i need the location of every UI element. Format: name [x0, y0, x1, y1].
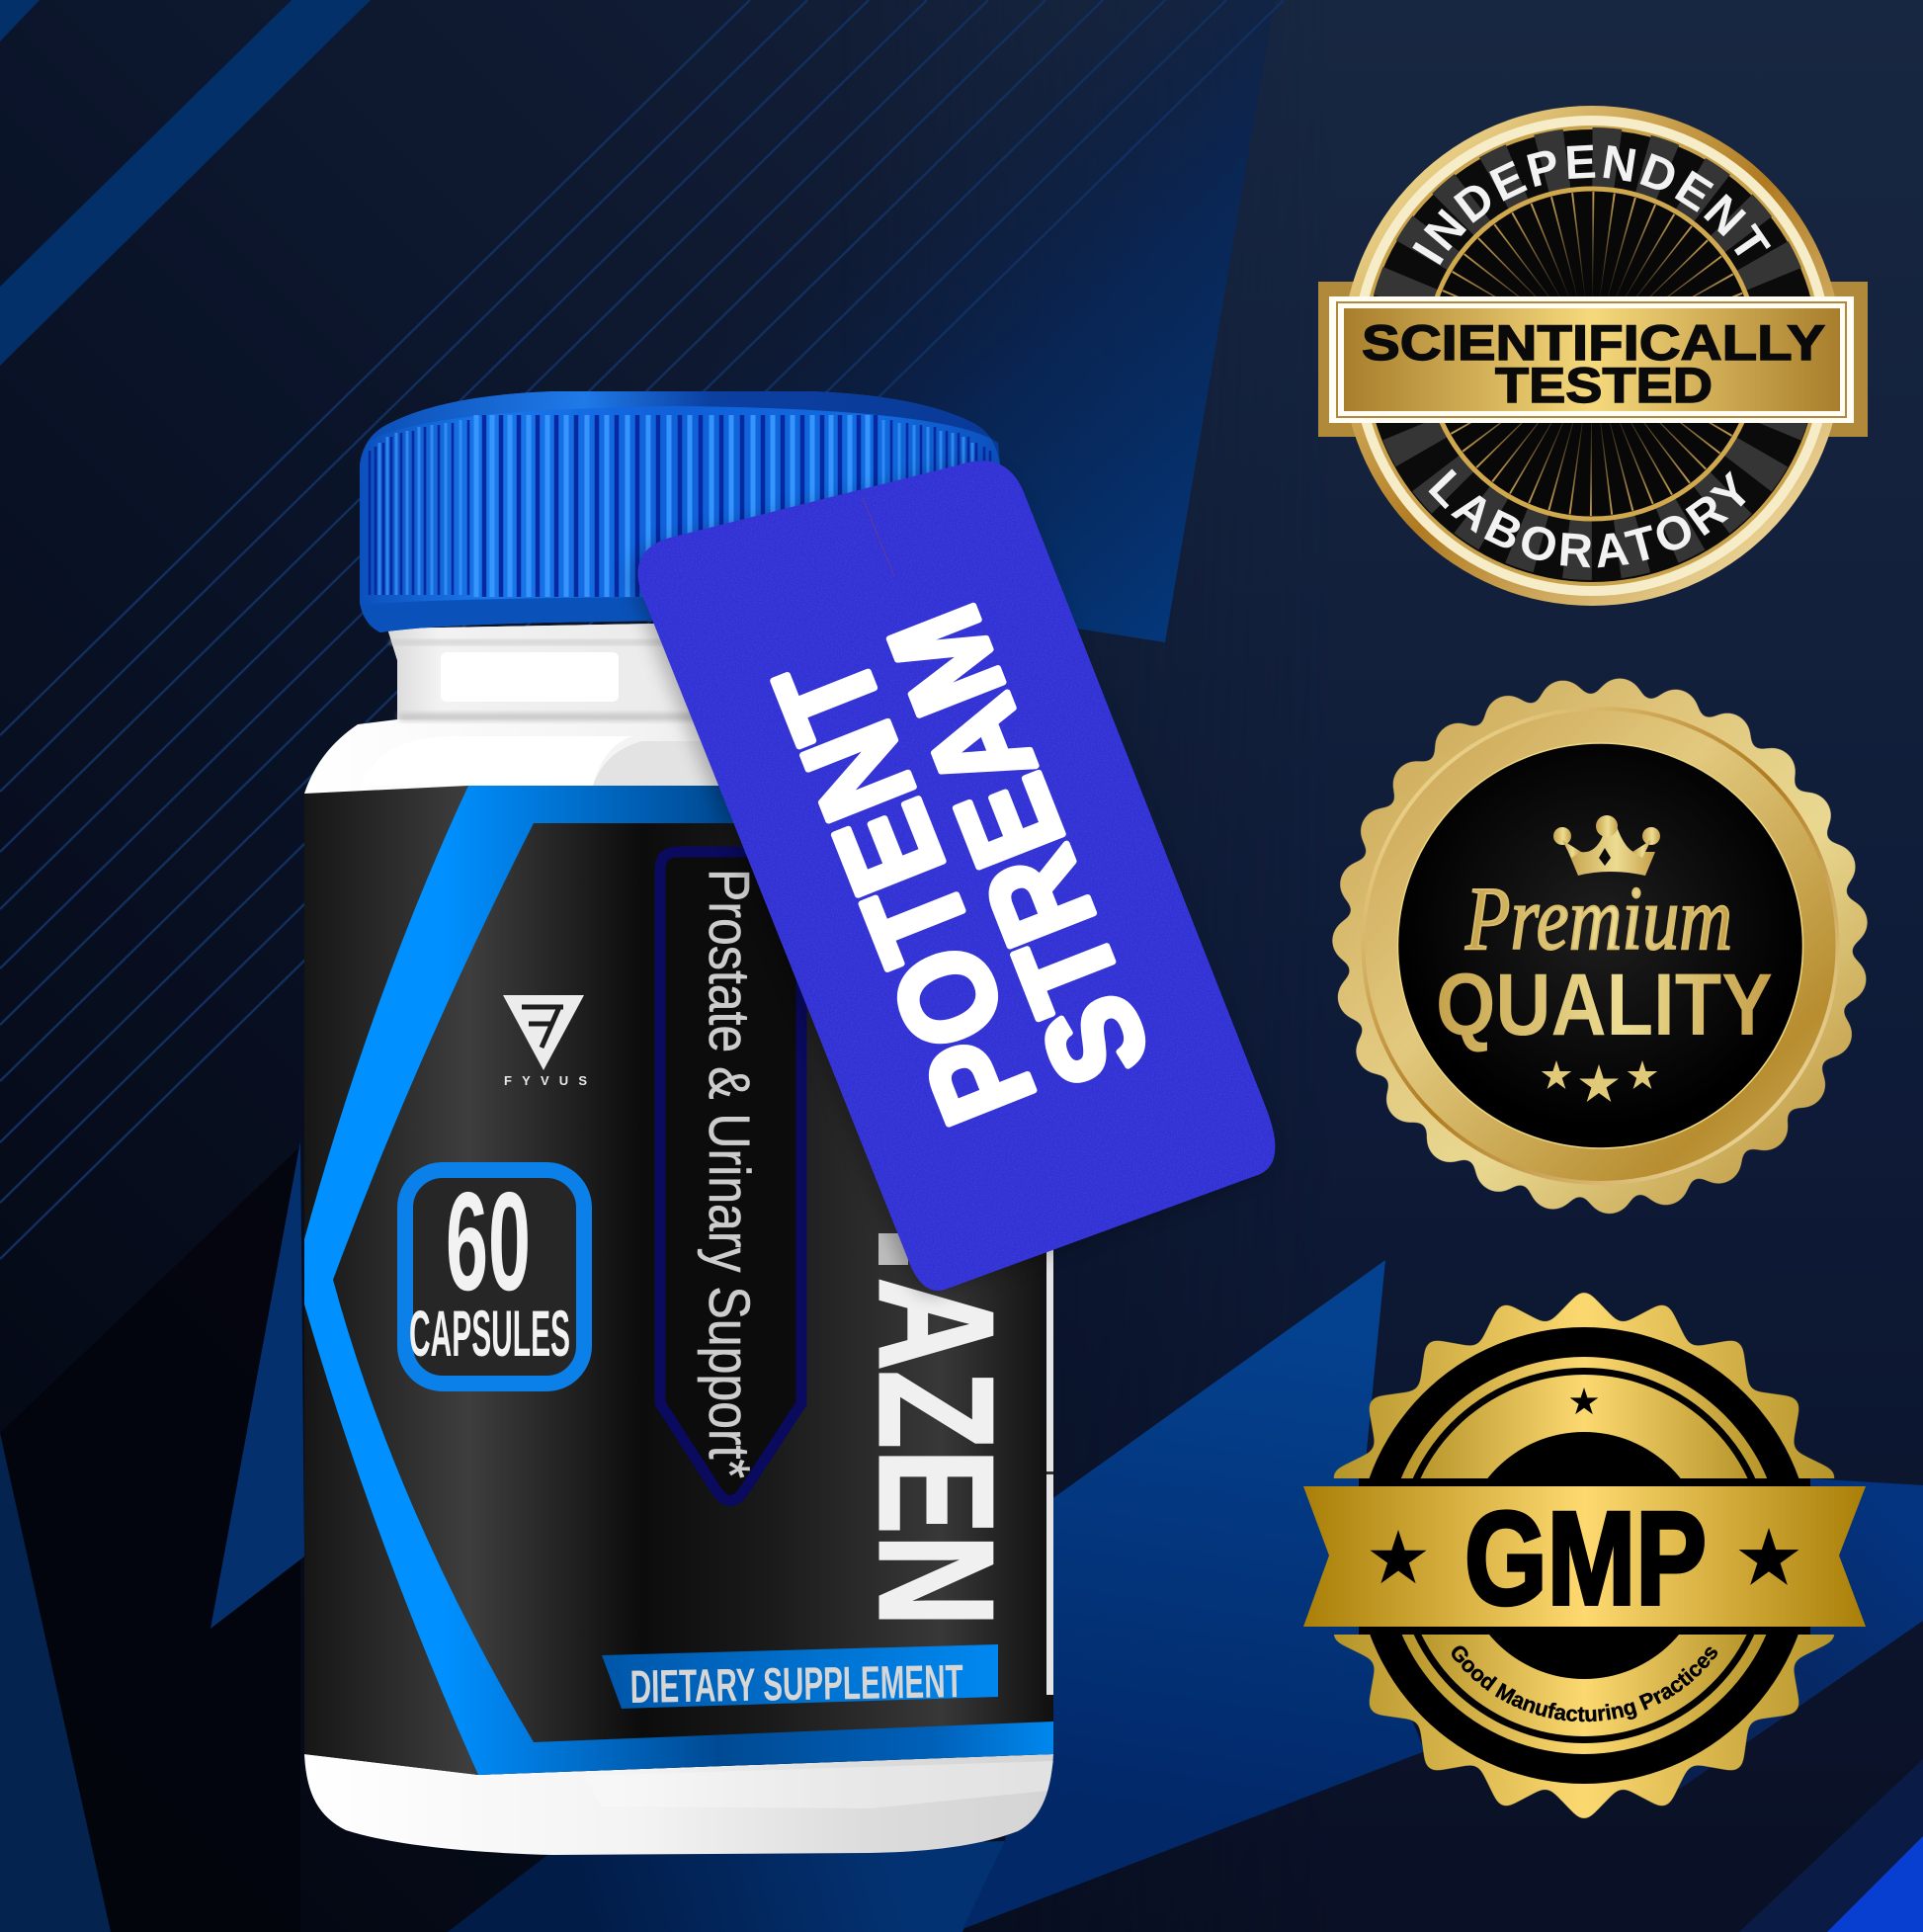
- good manufacturing practices arc text: Good Manufacturing Practices: [1452, 1646, 1717, 1722]
- premium script: Premium: [1464, 868, 1732, 968]
- hang tag: [632, 461, 1275, 1296]
- bottle label: CAPSULES: [409, 1297, 570, 1370]
- bottle label: [304, 786, 1053, 1775]
- badge: scientifically tested: [1318, 106, 1868, 606]
- badge: premium quality: [1352, 697, 1850, 1195]
- banner: [1329, 296, 1854, 423]
- badge: GMP: [1303, 1293, 1866, 1818]
- bottle cap: [360, 391, 1000, 632]
- dietary supplement band: [602, 1644, 998, 1713]
- claim text: Prostate & Urinary Support*: [697, 869, 761, 1478]
- ring spokes: [1396, 158, 1788, 549]
- capsule count box: [405, 1163, 584, 1384]
- dietary supplement band: DIETARY SUPPLEMENT: [629, 1654, 963, 1713]
- tag text: STREAM: [861, 588, 1177, 1103]
- blue hexagon stripe: [304, 786, 1053, 1775]
- product name: AZEN: [846, 1278, 1027, 1627]
- rating stars: [1542, 1060, 1657, 1102]
- independent arc text: INDEPENDENT: [1412, 144, 1771, 265]
- banner: SCIENTIFICALLY: [1362, 315, 1825, 371]
- wavy gold seal: [1317, 1289, 1851, 1822]
- top star: [1570, 1387, 1598, 1414]
- ribbon: [1303, 1485, 1866, 1633]
- supplement facts edge: [1046, 1225, 1053, 1695]
- banner: TESTED: [1495, 358, 1713, 413]
- bottle neck and shoulder: [304, 621, 1053, 998]
- supplement bottle: [304, 391, 1053, 1855]
- tag text: POTENT: [747, 635, 1063, 1141]
- bottle base: [304, 1754, 1053, 1855]
- claim pointer outline: [660, 852, 801, 1500]
- quality text: QUALITY: [1436, 955, 1773, 1053]
- sunburst centre: [1427, 189, 1757, 519]
- scalloped seal edge: [1352, 697, 1850, 1195]
- icon: crown: [1553, 815, 1660, 876]
- brand logo: [503, 995, 587, 1088]
- ribbon: GMP: [1464, 1485, 1707, 1633]
- capsule count box: 60: [446, 1163, 531, 1320]
- brand logo: FYVUS: [504, 1073, 587, 1088]
- laboratory arc text: LABORATORY: [1429, 468, 1745, 567]
